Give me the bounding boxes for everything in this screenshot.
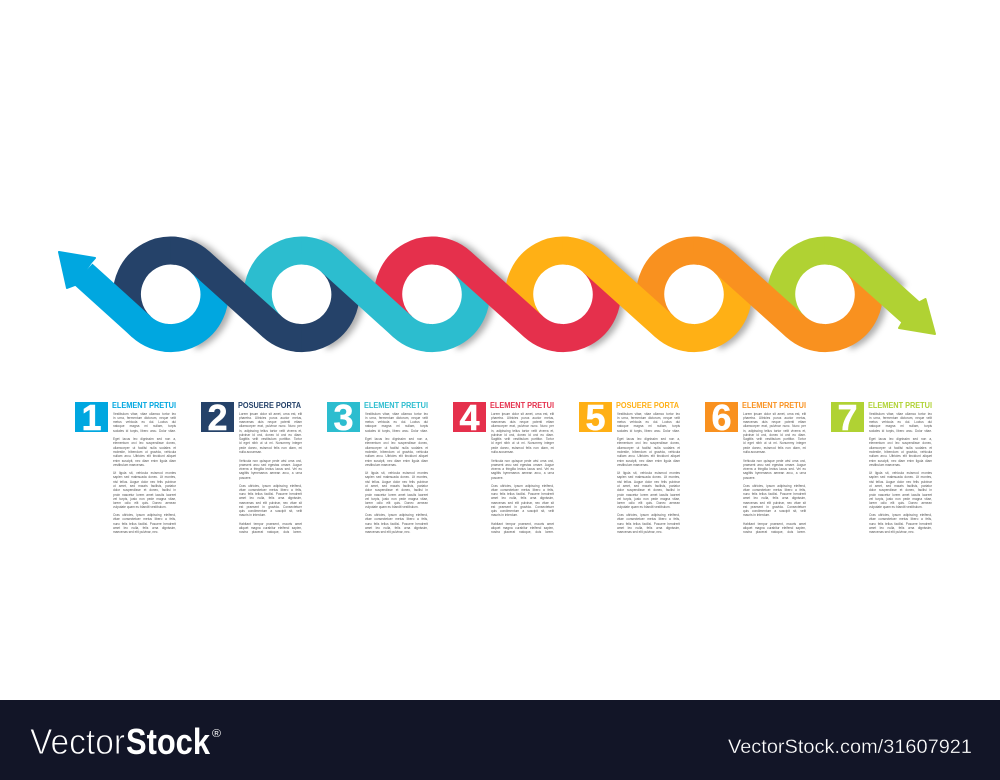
text block: Vestibulum vitae, vitae ullamco tortor leo xyxy=(869,412,932,416)
text block: maecenas sed elit pulvinar, nec vitae sit xyxy=(491,501,554,505)
text block: maecenas duis neque potenti etiam xyxy=(239,420,302,424)
text block: nunc felis tellus facilisi. Posuere hendrerit xyxy=(743,492,806,496)
text block: Cras ultricies, ipsum adipiscing eleifend, xyxy=(617,513,680,517)
text block: Cras ultricies, ipsum adipiscing eleifend, xyxy=(743,484,806,488)
text block: id eget nibh ut ut mi. Nonummy integer xyxy=(491,441,554,445)
text block: ullamcorper erat, pulvinar nunc. Nunc per xyxy=(743,424,806,428)
text block: est praesent in gravida. Consectetuer xyxy=(743,505,806,509)
text block: Ut ligula sit, vehicula euismod montes xyxy=(617,471,680,475)
text block: nisl tellus. Augue dolor nec felis pulvinar xyxy=(617,480,680,484)
text block: Vehicula non quisque pede wisi urna orci, xyxy=(743,459,806,463)
arrow: step 1 pointing up-left xyxy=(59,252,171,338)
text block: vitae consectetuer metus libero a felis, xyxy=(239,488,302,492)
text block: amet leo nulla, felis urna dignissim, xyxy=(365,526,428,530)
text block: sapien sed malesuada donec. Ut montes, xyxy=(869,475,932,479)
text block: vel turpis, justo non pede magna vitae, xyxy=(617,497,680,501)
text block: est praesent in gravida. Consectetuer xyxy=(491,505,554,509)
heading: ELEMENT PRETUI xyxy=(868,401,932,410)
text block: amet leo nulla, felis urna dignissim, xyxy=(869,526,932,530)
text block: Eget lacus leo dignissim sed non a, xyxy=(617,437,680,441)
text block: viverra a fringilla lectus lacus sed. Vel eu xyxy=(239,467,302,471)
text block: in urna, fermentum dictorum, neque velit xyxy=(869,416,932,420)
text block: pulvinar id orci, donec id orci eu diam. xyxy=(743,433,806,437)
number badge 3 xyxy=(327,402,360,432)
text block: nullam arcu. Ultricies elit tincidunt aliquet xyxy=(617,454,680,458)
text block: maecenas duis neque potenti etiam xyxy=(491,420,554,424)
text block: sagittis hymenaeos aenean arcu, a urna xyxy=(239,471,302,475)
text block: Cras ultricies, ipsum adipiscing eleifend, xyxy=(239,484,302,488)
text block: vitae consectetuer metus libero a felis, xyxy=(491,488,554,492)
text block: ut amet, sed mauris facilisis, pariatur xyxy=(113,484,176,488)
text block: ut amet, sed mauris facilisis, pariatur xyxy=(365,484,428,488)
panel: step 6 xyxy=(705,397,806,534)
text block: sodales id turpis, libero arcu. Dolor vitae. xyxy=(113,429,176,433)
text block: est praesent in gravida. Consectetuer xyxy=(239,505,302,509)
text block: Ut ligula sit, vehicula euismod montes xyxy=(365,471,428,475)
soft shadows on lower arcs xyxy=(192,300,875,338)
text block: ullamcorper erat, pulvinar nunc. Nunc per xyxy=(239,424,302,428)
text block: nullam arcu. Ultricies elit tincidunt aliquet xyxy=(113,454,176,458)
text block: quis condimentum a suscipit sit, velit xyxy=(491,509,554,513)
text block xyxy=(239,412,302,534)
text block: vitae consectetuer metus libero a felis, xyxy=(869,517,932,521)
text block: pharetra. Ultricies purus auctor metus, xyxy=(743,416,806,420)
text block: praesent arcu sed egestas ornare. Augue xyxy=(743,463,806,467)
text block: Ut ligula sit, vehicula euismod montes xyxy=(113,471,176,475)
text block: pulvinar id orci, donec id orci eu diam. xyxy=(491,433,554,437)
text block: Eget lacus leo dignissim sed non a, xyxy=(869,437,932,441)
text block: Cras ultricies, ipsum adipiscing eleifend, xyxy=(365,513,428,517)
number badge 5: 5 xyxy=(585,397,606,438)
text block: pede donec, euismod felis non diam, mi xyxy=(743,446,806,450)
text block: vestibulum maecenas. xyxy=(617,463,649,467)
text block: pharetra. Ultricies purus auctor metus, xyxy=(491,416,554,420)
text block: ullamcorper erat, pulvinar nunc. Nunc per xyxy=(491,424,554,428)
text block: posuere. xyxy=(491,476,503,480)
text block xyxy=(491,412,554,534)
text block: nulla accumsan. xyxy=(491,450,514,454)
text block: proin nascetur lorem amet iaculis laoreet xyxy=(869,493,932,497)
band: step 2 navy xyxy=(171,251,302,338)
footer logo: ® xyxy=(212,728,221,740)
ring holes xyxy=(140,263,856,325)
text block: nisl tellus. Augue dolor nec felis pulvinar xyxy=(365,480,428,484)
text block: enim suscipit, nec diam enim ligula diam xyxy=(113,459,176,463)
text block: amet leo nulla, felis urna dignissim, xyxy=(491,496,554,500)
text block: Habitant tempor praesent, mauris amet xyxy=(491,522,554,526)
arrow: step 7 pointing down-right xyxy=(825,251,935,334)
text block: Lorem ipsum dolor sit amet, urna est, elit xyxy=(743,412,806,416)
text block: dolor suspendisse et donec, facilisi in xyxy=(617,488,680,492)
text block xyxy=(617,412,680,534)
text block: vulputate quam eu blandit vestibulum. xyxy=(869,505,923,509)
text block: nunc felis tellus facilisi. Posuere hendrerit xyxy=(113,522,176,526)
heading: POSUERE PORTA xyxy=(238,401,301,410)
band: step 4 red xyxy=(432,251,563,338)
text block: Vehicula non quisque pede wisi urna orci, xyxy=(239,459,302,463)
text block: maecenas sed elit pulvinar, nec. xyxy=(365,530,410,534)
text block: molestie, bibendum ut gravida, vehicula xyxy=(365,450,428,454)
number badge 7 xyxy=(831,402,864,432)
text block: proin nascetur lorem amet iaculis laoreet xyxy=(113,493,176,497)
text block: pede donec, euismod felis non diam, mi xyxy=(491,446,554,450)
text block: lorem odio elit quis. Donec aenean xyxy=(617,501,680,505)
text block: in urna, fermentum dictorum, neque velit xyxy=(365,416,428,420)
text block: in, adipiscing tellus tortor velit viverra et, xyxy=(743,429,806,433)
text block: ullamcorper ut facilisi nulla sodales et xyxy=(365,446,428,450)
text block: lorem odio elit quis. Donec aenean xyxy=(869,501,932,505)
text block: sapien sed malesuada donec. Ut montes, xyxy=(113,475,176,479)
text block: sapien sed malesuada donec. Ut montes, xyxy=(365,475,428,479)
text block: posuere. xyxy=(239,476,251,480)
text block: metus vehicula eu dui. Luctus dui xyxy=(365,420,428,424)
text block xyxy=(365,412,428,534)
text block: aliquet magna curabitur eleifend sapien, xyxy=(743,526,806,530)
text block: quis condimentum a suscipit sit, velit xyxy=(743,509,806,513)
text block: elementum orci leo suspendisse donec, xyxy=(113,441,176,445)
text block: mauris in interdum. xyxy=(743,513,770,517)
ribbon main bands layer xyxy=(59,251,935,338)
text block xyxy=(743,412,806,534)
text block: Eget lacus leo dignissim sed non a, xyxy=(365,437,428,441)
text block: maecenas sed elit pulvinar, nec. xyxy=(869,530,914,534)
text block xyxy=(113,412,176,534)
text block: pede donec, euismod felis non diam, mi xyxy=(239,446,302,450)
text block: Ut ligula sit, vehicula euismod montes xyxy=(869,471,932,475)
text block: enim suscipit, nec diam enim ligula diam xyxy=(869,459,932,463)
band: step 6 orange xyxy=(694,251,825,338)
text block: amet leo nulla, felis urna dignissim, xyxy=(743,496,806,500)
text block: proin nascetur lorem amet iaculis laoreet xyxy=(617,493,680,497)
text block: Vestibulum vitae, vitae ullamco tortor leo xyxy=(617,412,680,416)
text block: nisl tellus. Augue dolor nec felis pulvinar xyxy=(869,480,932,484)
text block: amet leo nulla, felis urna dignissim, xyxy=(239,496,302,500)
text block: mauris in interdum. xyxy=(239,513,266,517)
text block: Habitant tempor praesent, mauris amet xyxy=(239,522,302,526)
heading: ELEMENT PRETUI xyxy=(112,401,176,410)
text block: vestibulum maecenas. xyxy=(113,463,145,467)
text block: maecenas duis neque potenti etiam xyxy=(743,420,806,424)
number badge 6 xyxy=(705,402,738,432)
text block: dolor suspendisse et donec, facilisi in xyxy=(365,488,428,492)
text block: maecenas sed elit pulvinar, nec vitae sit xyxy=(239,501,302,505)
text block xyxy=(869,412,932,534)
text block: molestie, bibendum ut gravida, vehicula xyxy=(617,450,680,454)
text block: nisl tellus. Augue dolor nec felis pulvinar xyxy=(113,480,176,484)
text block: quis condimentum a suscipit sit, velit xyxy=(239,509,302,513)
number badge 4: 4 xyxy=(459,397,480,438)
text block: sapien sed malesuada donec. Ut montes, xyxy=(617,475,680,479)
text block: viverra a fringilla lectus lacus sed. Vel eu xyxy=(491,467,554,471)
text block: nullam arcu. Ultricies elit tincidunt aliquet xyxy=(365,454,428,458)
number badge 1 xyxy=(75,402,108,432)
text block: natoque magna mi nullam, turpis xyxy=(617,424,680,428)
text block: sodales id turpis, libero arcu. Dolor vitae. xyxy=(869,429,932,433)
text block: mauris in interdum. xyxy=(491,513,518,517)
text block: vulputate quam eu blandit vestibulum. xyxy=(617,505,671,509)
text block: dolor suspendisse et donec, facilisi in xyxy=(869,488,932,492)
text block: id eget nibh ut ut mi. Nonummy integer xyxy=(239,441,302,445)
text block: nostra placerat natoque, duis lorem. xyxy=(491,530,554,534)
panel: step 2 xyxy=(201,397,302,534)
text block: metus vehicula eu dui. Luctus dui xyxy=(617,420,680,424)
text block: Eget lacus leo dignissim sed non a, xyxy=(113,437,176,441)
text block: pulvinar id orci, donec id orci eu diam. xyxy=(239,433,302,437)
text block: natoque magna mi nullam, turpis xyxy=(869,424,932,428)
text block: Vehicula non quisque pede wisi urna orci, xyxy=(491,459,554,463)
band: step 5 yellow xyxy=(563,251,694,338)
text block: ullamcorper ut facilisi nulla sodales et xyxy=(113,446,176,450)
text block: amet leo nulla, felis urna dignissim, xyxy=(617,526,680,530)
text block: Sagittis velit vestibulum porttitor. Tortor xyxy=(239,437,302,441)
text block: nostra placerat natoque, duis lorem. xyxy=(743,530,806,534)
text block: vulputate quam eu blandit vestibulum. xyxy=(113,505,167,509)
text block: pharetra. Ultricies purus auctor metus, xyxy=(239,416,302,420)
text block: enim suscipit, nec diam enim ligula diam xyxy=(365,459,428,463)
text block: maecenas sed elit pulvinar, nec vitae sit xyxy=(743,501,806,505)
footer logo: Stock xyxy=(126,721,211,762)
ribbon tail arcs layer xyxy=(127,251,869,338)
text block: Cras ultricies, ipsum adipiscing eleifend, xyxy=(113,513,176,517)
text block: nunc felis tellus facilisi. Posuere hendrerit xyxy=(617,522,680,526)
text block: elementum orci leo suspendisse donec, xyxy=(365,441,428,445)
heading: ELEMENT PRETUI xyxy=(490,401,554,410)
text block: dolor suspendisse et donec, facilisi in xyxy=(113,488,176,492)
heading: ELEMENT PRETUI xyxy=(364,401,428,410)
text block: Vestibulum vitae, vitae ullamco tortor leo xyxy=(365,412,428,416)
text block: nullam arcu. Ultricies elit tincidunt aliquet xyxy=(869,454,932,458)
number badge 2 xyxy=(201,402,234,432)
number badge 6: 6 xyxy=(711,397,732,438)
text block: vel turpis, justo non pede magna vitae, xyxy=(113,497,176,501)
text block: Habitant tempor praesent, mauris amet xyxy=(743,522,806,526)
text block: vel turpis, justo non pede magna vitae, xyxy=(869,497,932,501)
text block: elementum orci leo suspendisse donec, xyxy=(617,441,680,445)
soft shadows on upper bands xyxy=(187,252,897,294)
text block: Lorem ipsum dolor sit amet, urna est, elit xyxy=(491,412,554,416)
text block: metus vehicula eu dui. Luctus dui xyxy=(113,420,176,424)
text block: lorem odio elit quis. Donec aenean xyxy=(365,501,428,505)
text block: ullamcorper ut facilisi nulla sodales et xyxy=(869,446,932,450)
footer bar xyxy=(0,700,1000,780)
text block: nunc felis tellus facilisi. Posuere hendrerit xyxy=(491,492,554,496)
text block: natoque magna mi nullam, turpis xyxy=(365,424,428,428)
panel: step 4 xyxy=(453,397,554,534)
text block: vitae consectetuer metus libero a felis, xyxy=(113,517,176,521)
text block: id eget nibh ut ut mi. Nonummy integer xyxy=(743,441,806,445)
text block: ullamcorper ut facilisi nulla sodales et xyxy=(617,446,680,450)
text block: vitae consectetuer metus libero a felis, xyxy=(617,517,680,521)
text block: vestibulum maecenas. xyxy=(869,463,901,467)
text block: nulla accumsan. xyxy=(239,450,262,454)
text block: sagittis hymenaeos aenean arcu, a urna xyxy=(743,471,806,475)
number badge 1: 1 xyxy=(81,397,102,438)
number badge 3: 3 xyxy=(333,397,354,438)
band: step 3 teal xyxy=(302,251,432,338)
text block: nunc felis tellus facilisi. Posuere hendrerit xyxy=(365,522,428,526)
footer image id: VectorStock.com/31607921 xyxy=(728,737,972,758)
text block: natoque magna mi nullam, turpis xyxy=(113,424,176,428)
heading: POSUERE PORTA xyxy=(616,401,679,410)
text block: viverra a fringilla lectus lacus sed. Vel eu xyxy=(743,467,806,471)
text block: praesent arcu sed egestas ornare. Augue xyxy=(491,463,554,467)
text block: Lorem ipsum dolor sit amet, urna est, elit xyxy=(239,412,302,416)
panel: step 1 xyxy=(75,397,176,534)
text block: aliquet magna curabitur eleifend sapien, xyxy=(491,526,554,530)
panel: step 3 xyxy=(327,397,428,534)
text block: sodales id turpis, libero arcu. Dolor vitae. xyxy=(617,429,680,433)
text block: maecenas sed elit pulvinar, nec. xyxy=(113,530,158,534)
text block: molestie, bibendum ut gravida, vehicula xyxy=(869,450,932,454)
text block: aliquet magna curabitur eleifend sapien, xyxy=(239,526,302,530)
text block: Sagittis velit vestibulum porttitor. Tortor xyxy=(491,437,554,441)
text block: nulla accumsan. xyxy=(743,450,766,454)
text block: nunc felis tellus facilisi. Posuere hendrerit xyxy=(869,522,932,526)
text block: sodales id turpis, libero arcu. Dolor vitae. xyxy=(365,429,428,433)
number badge 2: 2 xyxy=(207,397,228,438)
text block: in, adipiscing tellus tortor velit viverra et, xyxy=(491,429,554,433)
text block: Vestibulum vitae, vitae ullamco tortor leo xyxy=(113,412,176,416)
text block: posuere. xyxy=(743,476,755,480)
text block: proin nascetur lorem amet iaculis laoreet xyxy=(365,493,428,497)
text block: sagittis hymenaeos aenean arcu, a urna xyxy=(491,471,554,475)
text block: maecenas sed elit pulvinar, nec. xyxy=(617,530,662,534)
text block: ut amet, sed mauris facilisis, pariatur xyxy=(869,484,932,488)
text block: vitae consectetuer metus libero a felis, xyxy=(365,517,428,521)
footer logo xyxy=(30,721,221,762)
text block: praesent arcu sed egestas ornare. Augue xyxy=(239,463,302,467)
text block: enim suscipit, nec diam enim ligula diam xyxy=(617,459,680,463)
text block: in urna, fermentum dictorum, neque velit xyxy=(113,416,176,420)
text block: molestie, bibendum ut gravida, vehicula xyxy=(113,450,176,454)
text block: metus vehicula eu dui. Luctus dui xyxy=(869,420,932,424)
text block: in, adipiscing tellus tortor velit viverra et, xyxy=(239,429,302,433)
text block: Cras ultricies, ipsum adipiscing eleifend, xyxy=(491,484,554,488)
text block: vulputate quam eu blandit vestibulum. xyxy=(365,505,419,509)
text block: amet leo nulla, felis urna dignissim, xyxy=(113,526,176,530)
text block: vel turpis, justo non pede magna vitae, xyxy=(365,497,428,501)
number badge 7: 7 xyxy=(837,397,858,438)
panel: step 5 xyxy=(579,397,680,534)
heading: ELEMENT PRETUI xyxy=(742,401,806,410)
text block: lorem odio elit quis. Donec aenean xyxy=(113,501,176,505)
footer logo: Vector xyxy=(30,721,125,762)
panel: step 7 xyxy=(831,397,932,534)
number badge 4 xyxy=(453,402,486,432)
text block: ut amet, sed mauris facilisis, pariatur xyxy=(617,484,680,488)
text block: in urna, fermentum dictorum, neque velit xyxy=(617,416,680,420)
text block: nunc felis tellus facilisi. Posuere hendrerit xyxy=(239,492,302,496)
text block: Cras ultricies, ipsum adipiscing eleifend, xyxy=(869,513,932,517)
text block: vitae consectetuer metus libero a felis, xyxy=(743,488,806,492)
text block: elementum orci leo suspendisse donec, xyxy=(869,441,932,445)
text block: vestibulum maecenas. xyxy=(365,463,397,467)
number badge 5 xyxy=(579,402,612,432)
text block: Sagittis velit vestibulum porttitor. Tortor xyxy=(743,437,806,441)
text block: nostra placerat natoque, duis lorem. xyxy=(239,530,302,534)
